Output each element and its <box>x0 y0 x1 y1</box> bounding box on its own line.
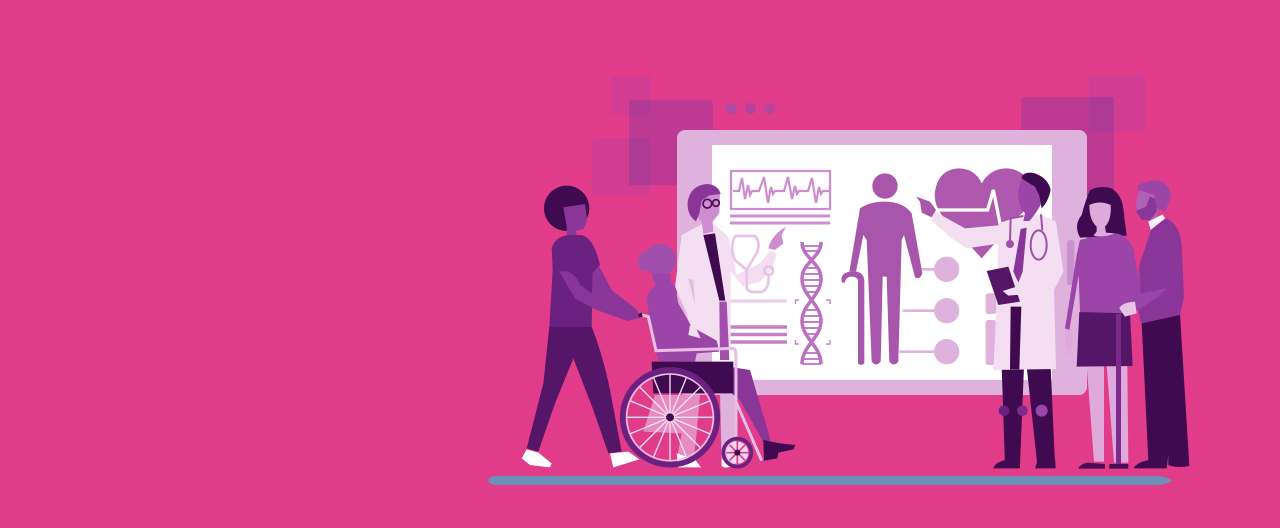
clipboard <box>987 267 1020 305</box>
older man with beard <box>1119 181 1189 468</box>
hand on clipboard <box>1003 285 1023 296</box>
skirt <box>1077 312 1133 367</box>
head <box>644 244 676 276</box>
white slippers <box>677 453 733 468</box>
shoes <box>993 458 1020 468</box>
heart icon with pulse <box>935 168 1033 258</box>
collar <box>1148 214 1165 230</box>
pointing hand <box>916 197 936 217</box>
shoes <box>1078 463 1105 469</box>
coat <box>993 215 1063 370</box>
near leg light <box>720 392 737 467</box>
glasses <box>703 199 719 208</box>
hand <box>1119 302 1137 317</box>
decorative squares left <box>592 76 713 196</box>
trousers <box>1002 367 1024 465</box>
wheelchair patient <box>638 244 795 468</box>
coat <box>675 223 777 350</box>
dark trouser gap <box>1010 307 1021 369</box>
patient silhouette icon with cane <box>841 173 922 365</box>
three dots <box>726 103 775 114</box>
woman with cane <box>1065 187 1138 469</box>
small wheel <box>723 439 751 467</box>
shirt <box>549 235 600 327</box>
sleeve fold <box>1128 265 1167 312</box>
legs <box>1087 365 1104 462</box>
shoe <box>763 440 795 461</box>
sweater <box>1065 233 1138 330</box>
inner shirt <box>703 233 725 301</box>
tie <box>1013 228 1027 283</box>
wheelchair <box>623 313 762 467</box>
seat <box>652 362 733 393</box>
hair <box>1077 187 1127 238</box>
caregiver pushing wheelchair <box>522 186 639 467</box>
sweater <box>1137 218 1184 324</box>
trousers <box>1133 314 1189 468</box>
handle <box>626 313 643 321</box>
decorative squares right <box>1021 75 1146 227</box>
near leg <box>732 367 771 442</box>
pointing doctor with clipboard <box>916 173 1063 468</box>
trouser strip <box>719 302 729 360</box>
beard <box>1136 197 1157 220</box>
connector nodes <box>899 257 959 364</box>
face and neck <box>563 204 587 242</box>
cane <box>1116 314 1121 464</box>
hair <box>544 186 589 231</box>
face <box>1018 177 1042 221</box>
big wheel <box>623 370 717 465</box>
pointing arm <box>932 212 1002 248</box>
arm <box>559 267 639 321</box>
trouser dots <box>999 405 1009 416</box>
hand <box>768 227 786 250</box>
stethoscope <box>1010 214 1047 260</box>
ECG monitor panel <box>730 171 830 223</box>
hand <box>1065 330 1073 356</box>
tablet frame <box>677 130 1087 395</box>
hair <box>1022 173 1051 208</box>
tablet screen <box>712 145 1052 380</box>
face and neck <box>695 193 720 234</box>
neck and face <box>1136 190 1158 220</box>
shoes <box>522 449 552 467</box>
far leg behind wheel <box>643 395 700 457</box>
side screen controls <box>986 240 1074 365</box>
trousers <box>527 327 622 453</box>
neck and face <box>1089 202 1115 236</box>
hair <box>1137 181 1171 212</box>
doctor with glasses <box>675 184 786 360</box>
hair <box>688 184 721 221</box>
coat shading <box>688 278 695 305</box>
stethoscope <box>732 236 773 292</box>
DNA helix <box>796 242 830 364</box>
body <box>647 283 719 362</box>
floor shadow <box>488 476 1172 485</box>
frame <box>642 315 762 461</box>
text lines on screen <box>730 301 787 342</box>
